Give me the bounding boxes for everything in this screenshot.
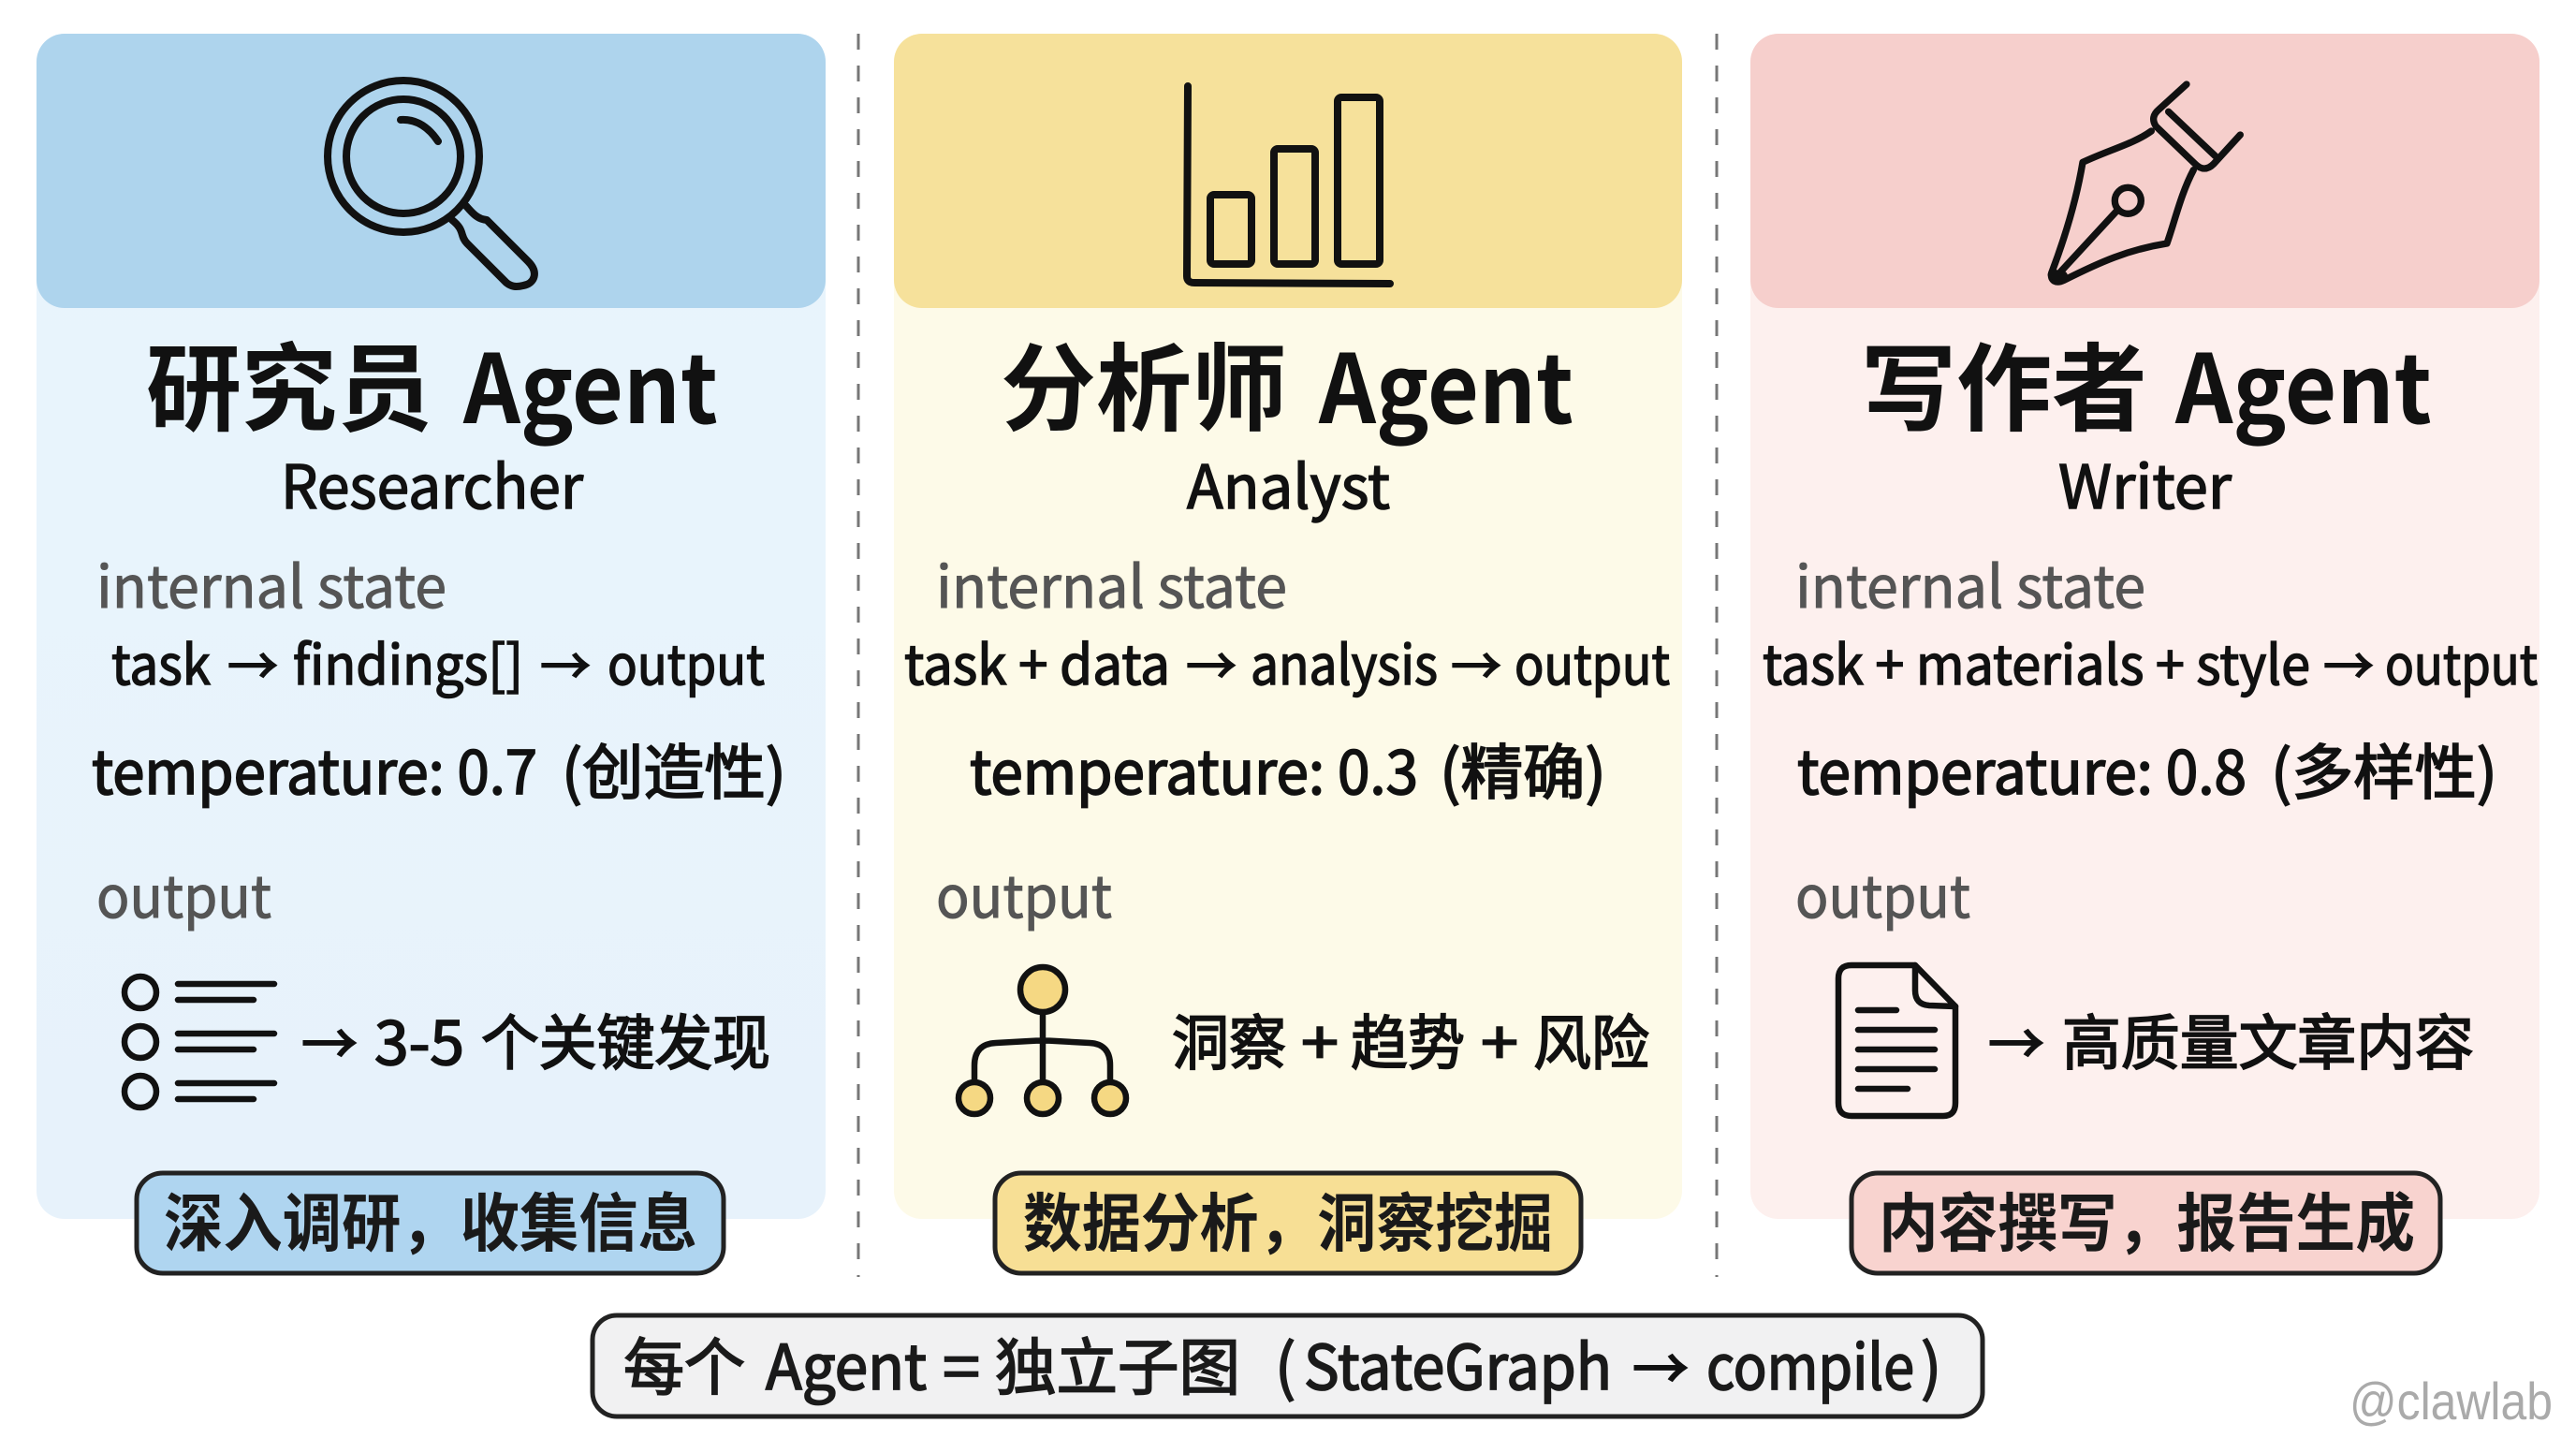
state flow: analysis: [1251, 622, 1438, 700]
temperature setting: temperature: 0.3: [970, 726, 1418, 812]
watermark: @clawlab: [2349, 1372, 2553, 1431]
analyst header band: [894, 34, 1682, 308]
divider: left dashed line: [857, 34, 859, 1277]
temperature setting: (创造性): [562, 726, 786, 812]
temperature setting: (多样性): [2271, 726, 2497, 812]
output summary: +: [1301, 996, 1339, 1082]
researcher title latin: Agent: [462, 314, 718, 451]
analyst card body: [894, 34, 1682, 1219]
researcher title: 研究员: [146, 314, 432, 451]
state flow: [111, 622, 765, 700]
state flow: →: [1451, 625, 1501, 699]
writer english name: Writer: [2058, 440, 2232, 526]
writer title: 写作者: [1861, 314, 2147, 451]
output summary: →: [1988, 1000, 2044, 1081]
internal state label: internal state: [96, 540, 446, 624]
pill: role summary: 深入调研，收集信息: [164, 1172, 697, 1265]
internal state label: internal state: [936, 540, 1287, 624]
output summary: →: [301, 1000, 358, 1081]
writer header band: [1750, 34, 2539, 308]
state flow: task + data: [904, 622, 1170, 700]
icon: bar chart: [1187, 86, 1390, 284]
temperature setting: (精确): [1440, 726, 1606, 812]
icon: document: [1838, 965, 1955, 1116]
output label: output: [1795, 850, 1970, 934]
internal state label: internal state: [1795, 540, 2145, 624]
output summary: 风险: [1533, 996, 1649, 1082]
callout: each agent is an independent subgraph: StateGraph: [1304, 1318, 1612, 1408]
state flow: →: [227, 625, 278, 699]
output summary: 个关键发现: [481, 996, 770, 1082]
callout: each agent is an independent subgraph: [593, 1315, 1983, 1416]
pill: role summary: 数据分析，洞察挖掘: [1023, 1172, 1553, 1265]
icon: magnifying glass: [328, 81, 534, 286]
temperature setting: temperature: 0.7: [92, 726, 537, 812]
callout: each agent is an independent subgraph: compile: [1706, 1318, 1914, 1408]
output summary: [301, 996, 770, 1082]
callout: each agent is an independent subgraph: Agent: [766, 1318, 927, 1408]
state flow: task + materials + style: [1763, 622, 2310, 700]
writer card body: [1750, 34, 2539, 1219]
researcher english name: Researcher: [281, 440, 583, 526]
output summary: +: [1481, 996, 1518, 1082]
analyst title: 分析师: [1001, 314, 1287, 451]
analyst title latin: Agent: [1318, 314, 1573, 451]
temperature setting: temperature: 0.8: [1797, 726, 2247, 812]
callout: each agent is an independent subgraph: 独立子图: [995, 1318, 1240, 1408]
temperature setting: [1797, 726, 2497, 812]
state flow: →: [540, 625, 591, 699]
divider: right dashed line: [1715, 34, 1719, 1277]
analyst english name: Analyst: [1187, 440, 1390, 526]
state flow: output: [2385, 622, 2538, 700]
writer title latin: Agent: [2174, 314, 2432, 451]
output label: output: [96, 850, 271, 934]
callout: each agent is an independent subgraph: =: [943, 1318, 980, 1408]
panel: writer: [1750, 34, 2539, 1273]
output summary: 趋势: [1351, 996, 1465, 1082]
output label: output: [936, 850, 1112, 934]
output summary: 3-5: [374, 996, 464, 1082]
callout: each agent is an independent subgraph: 每个: [623, 1318, 745, 1408]
icon: fountain pen nib: [2051, 84, 2240, 282]
researcher header band: [37, 34, 826, 308]
output summary: 洞察: [1172, 996, 1286, 1082]
state flow: [904, 622, 1670, 700]
researcher card body: [37, 34, 826, 1219]
output summary: [1172, 996, 1649, 1082]
state flow: findings[]: [293, 622, 523, 700]
state flow: →: [1186, 625, 1237, 699]
pill: role summary: 内容撰写，报告生成: [1879, 1172, 2415, 1265]
state flow: output: [607, 622, 765, 700]
icon: tree diagram: [959, 967, 1126, 1114]
state flow: task: [111, 622, 211, 700]
callout: each agent is an independent subgraph: →: [1632, 1325, 1689, 1406]
callout: each agent is an independent subgraph: (: [1275, 1318, 1295, 1408]
panel: researcher: [37, 34, 826, 1273]
callout: each agent is an independent subgraph: ): [1921, 1318, 1941, 1408]
temperature setting: [92, 726, 786, 812]
state flow: output: [1515, 622, 1670, 700]
state flow: →: [2323, 625, 2374, 699]
output summary: 高质量文章内容: [2062, 996, 2474, 1082]
panel: analyst: [894, 34, 1682, 1273]
icon: bullet list: [124, 976, 274, 1108]
